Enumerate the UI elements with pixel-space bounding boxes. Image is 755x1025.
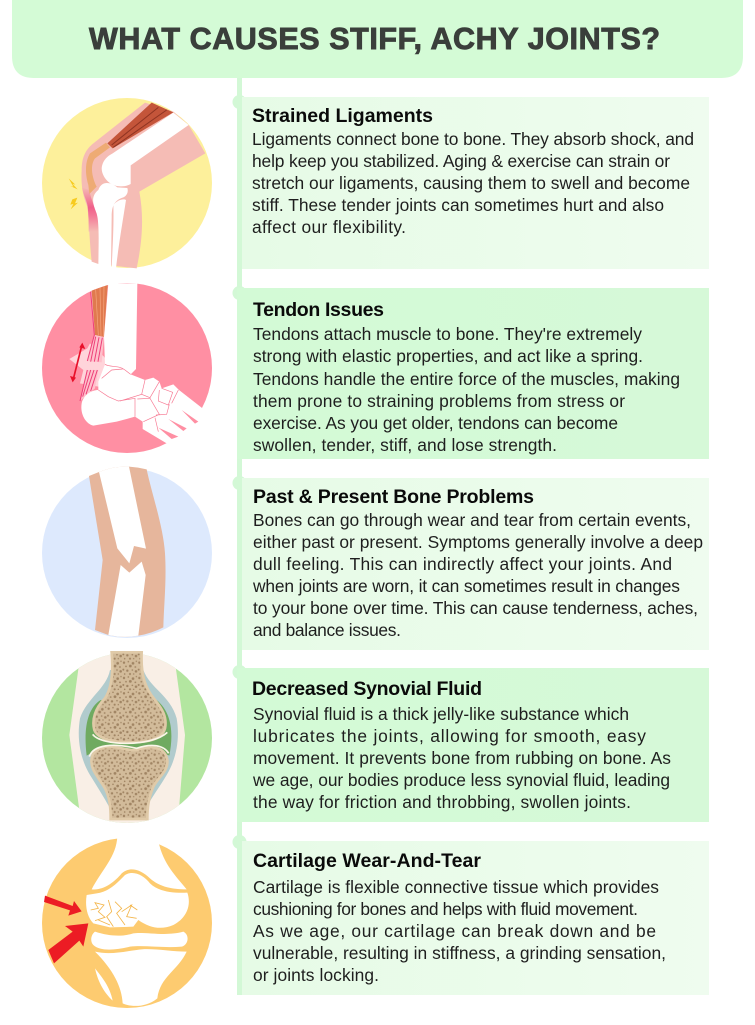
title: WHAT CAUSES STIFF, ACHY JOINTS? bbox=[89, 22, 660, 56]
panel: tendon issues bbox=[237, 288, 709, 459]
body text: synovial fluid: lubricates the joints, allowing for smooth, easy bbox=[253, 726, 646, 746]
body text: bone problems: Bones can go through wear and tear from certain events, bbox=[253, 510, 691, 530]
icon: synovial joint bbox=[42, 651, 212, 823]
icon: fractured bone bbox=[42, 467, 212, 638]
body text: synovial fluid: Synovial fluid is a thick jelly-like substance which bbox=[253, 704, 629, 724]
title banner bbox=[12, 0, 743, 78]
body text: synovial fluid: we age, our bodies produce less synovial fluid, leading bbox=[252, 770, 670, 790]
body text: tendon issues bbox=[253, 324, 680, 455]
body text: bone problems: when joints are worn, it can sometimes result in changes bbox=[252, 576, 680, 596]
body text: synovial fluid: the way for friction and throbbing, swollen joints. bbox=[253, 792, 631, 812]
body text: bone problems bbox=[252, 510, 703, 640]
icon: knee ligament bbox=[42, 98, 212, 268]
body text: strained ligaments: help keep you stabilized. Aging & exercise can strain or bbox=[252, 151, 670, 171]
body text: strained ligaments bbox=[252, 129, 694, 237]
icon: ankle tendon bbox=[42, 283, 230, 453]
body text: cartilage wear: As we age, our cartilage can break down and be bbox=[253, 921, 656, 941]
heading: strained ligaments: Strained Ligaments bbox=[252, 105, 433, 127]
body text: bone problems: to your bone over time. This can cause tenderness, aches, bbox=[253, 598, 698, 618]
body text: tendon issues: swollen, tender, stiff, and lose strength. bbox=[253, 435, 557, 455]
body text: synovial fluid: movement. It prevents bone from rubbing on bone. As bbox=[253, 748, 671, 768]
panel: strained ligaments bbox=[242, 97, 709, 269]
body text: cartilage wear bbox=[253, 877, 666, 985]
timeline line with dots bbox=[232, 78, 246, 995]
body text: cartilage wear: vulnerable, resulting in stiffness, a grinding sensation, bbox=[253, 943, 666, 963]
body text: tendon issues: them prone to straining problems from stress or bbox=[253, 391, 625, 411]
panel: bone problems bbox=[242, 478, 709, 650]
body text: tendon issues: exercise. As you get older, tendons can become bbox=[253, 413, 618, 433]
body text: bone problems: either past or present. Symptoms generally involve a deep bbox=[253, 532, 703, 552]
body text: cartilage wear: Cartilage is flexible connective tissue which provides bbox=[253, 877, 659, 897]
body text: cartilage wear: cushioning for bones and helps with fluid movement. bbox=[253, 899, 638, 919]
heading: cartilage wear: Cartilage Wear-And-Tear bbox=[253, 850, 481, 872]
body text: strained ligaments: Ligaments connect bone to bone. They absorb shock, and bbox=[252, 129, 694, 149]
heading: bone problems: Past & Present Bone Problems bbox=[253, 486, 534, 508]
body text: strained ligaments: affect our flexibility. bbox=[252, 217, 406, 237]
body text: strained ligaments: stiff. These tender joints can sometimes hurt and also bbox=[252, 195, 664, 215]
body text: bone problems: dull feeling. This can indirectly affect your joints. And bbox=[253, 554, 672, 574]
body text: cartilage wear: or joints locking. bbox=[253, 965, 379, 985]
heading: tendon issues: Tendon Issues bbox=[253, 299, 384, 321]
icon: cartilage joint bbox=[42, 834, 212, 1008]
body text: synovial fluid bbox=[252, 704, 671, 812]
body text: strained ligaments: stretch our ligaments, causing them to swell and become bbox=[252, 173, 690, 193]
body text: tendon issues: Tendons attach muscle to bone. They're extremely bbox=[253, 324, 642, 344]
body text: tendon issues: Tendons handle the entire force of the muscles, making bbox=[253, 369, 680, 389]
body text: bone problems: and balance issues. bbox=[253, 620, 401, 640]
heading: synovial fluid: Decreased Synovial Fluid bbox=[252, 678, 482, 700]
panel: synovial fluid bbox=[237, 668, 709, 822]
body text: tendon issues: strong with elastic properties, and act like a spring. bbox=[253, 346, 643, 366]
panel: cartilage wear bbox=[242, 841, 709, 995]
